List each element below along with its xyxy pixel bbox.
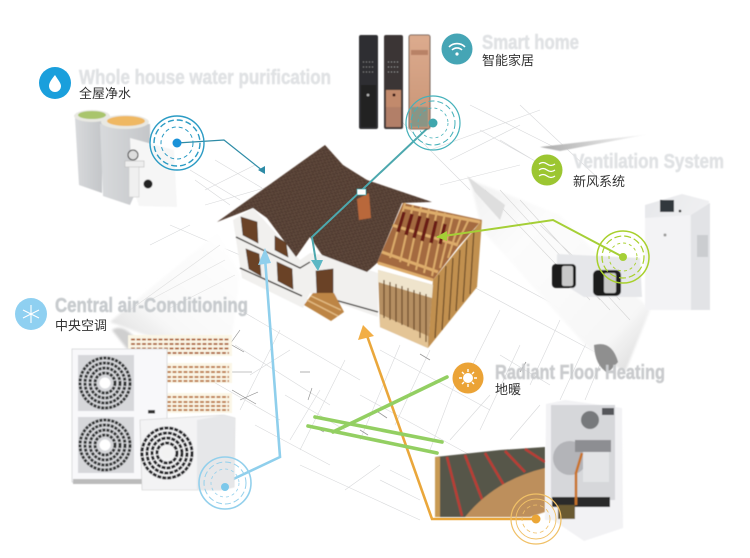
title: air conditioning: Central air-Conditioning <box>55 295 248 317</box>
connector: water purification <box>177 140 265 174</box>
label: 智能家居: 智能家居 <box>482 53 534 68</box>
lock: black <box>359 35 378 129</box>
house windows <box>241 217 333 295</box>
lock: bronze <box>384 35 403 129</box>
heading: ventilation <box>532 151 724 189</box>
title: water purification: Whole house water purification <box>79 67 331 89</box>
house roof <box>217 145 432 272</box>
icon: air waves <box>532 154 562 186</box>
rolled blueprint: left <box>110 232 240 350</box>
product: smart door locks <box>359 35 430 129</box>
product: large outdoor AC unit <box>72 349 167 484</box>
icon: snowflake <box>15 298 47 330</box>
timber roof frame <box>377 203 482 280</box>
green floor pipes <box>308 377 447 453</box>
pulse rings: floor heating <box>511 494 561 544</box>
connector: ventilation <box>436 220 623 257</box>
connector: smart home <box>311 123 433 271</box>
product: water purifier <box>74 110 177 207</box>
heading: water purification <box>39 67 331 101</box>
timber side wall <box>428 220 482 348</box>
heading: air conditioning <box>15 295 248 333</box>
pulse rings: ventilation <box>597 231 649 283</box>
icon: wifi <box>442 34 472 64</box>
pulse rings: air conditioning <box>199 457 251 509</box>
icon: sun <box>452 362 484 394</box>
icon: water drop <box>39 67 71 99</box>
product: ventilation units <box>552 194 710 310</box>
fresh air cabinet <box>645 194 710 310</box>
product: small outdoor AC unit <box>140 415 235 490</box>
heating coil panels <box>128 335 232 413</box>
heading: smart home <box>442 32 579 68</box>
heading: floor heating <box>452 362 665 397</box>
heat exchanger <box>552 254 642 297</box>
pulse rings: water <box>150 116 204 170</box>
house <box>217 145 482 348</box>
connector: air conditioning <box>225 248 280 483</box>
product: wall boiler <box>545 400 623 541</box>
title: ventilation: Ventilation System <box>573 151 724 173</box>
title: floor heating: Radiant Floor Heating <box>495 362 665 384</box>
label: 新风系统: 新风系统 <box>573 174 625 189</box>
label: 中央空调: 中央空调 <box>55 318 107 333</box>
chimney <box>357 193 371 220</box>
label: 全屋净水: 全屋净水 <box>79 86 131 101</box>
house steps <box>304 293 344 321</box>
lock: rose gold <box>409 35 430 129</box>
product: underfloor heating sample <box>435 447 545 517</box>
house walls <box>233 208 378 317</box>
title: smart home: Smart home <box>482 32 579 54</box>
pulse rings: smart home <box>406 96 460 150</box>
label: 地暖: 地暖 <box>495 382 521 397</box>
connector: floor heating <box>358 325 536 519</box>
rolled blueprint: right <box>467 134 650 373</box>
